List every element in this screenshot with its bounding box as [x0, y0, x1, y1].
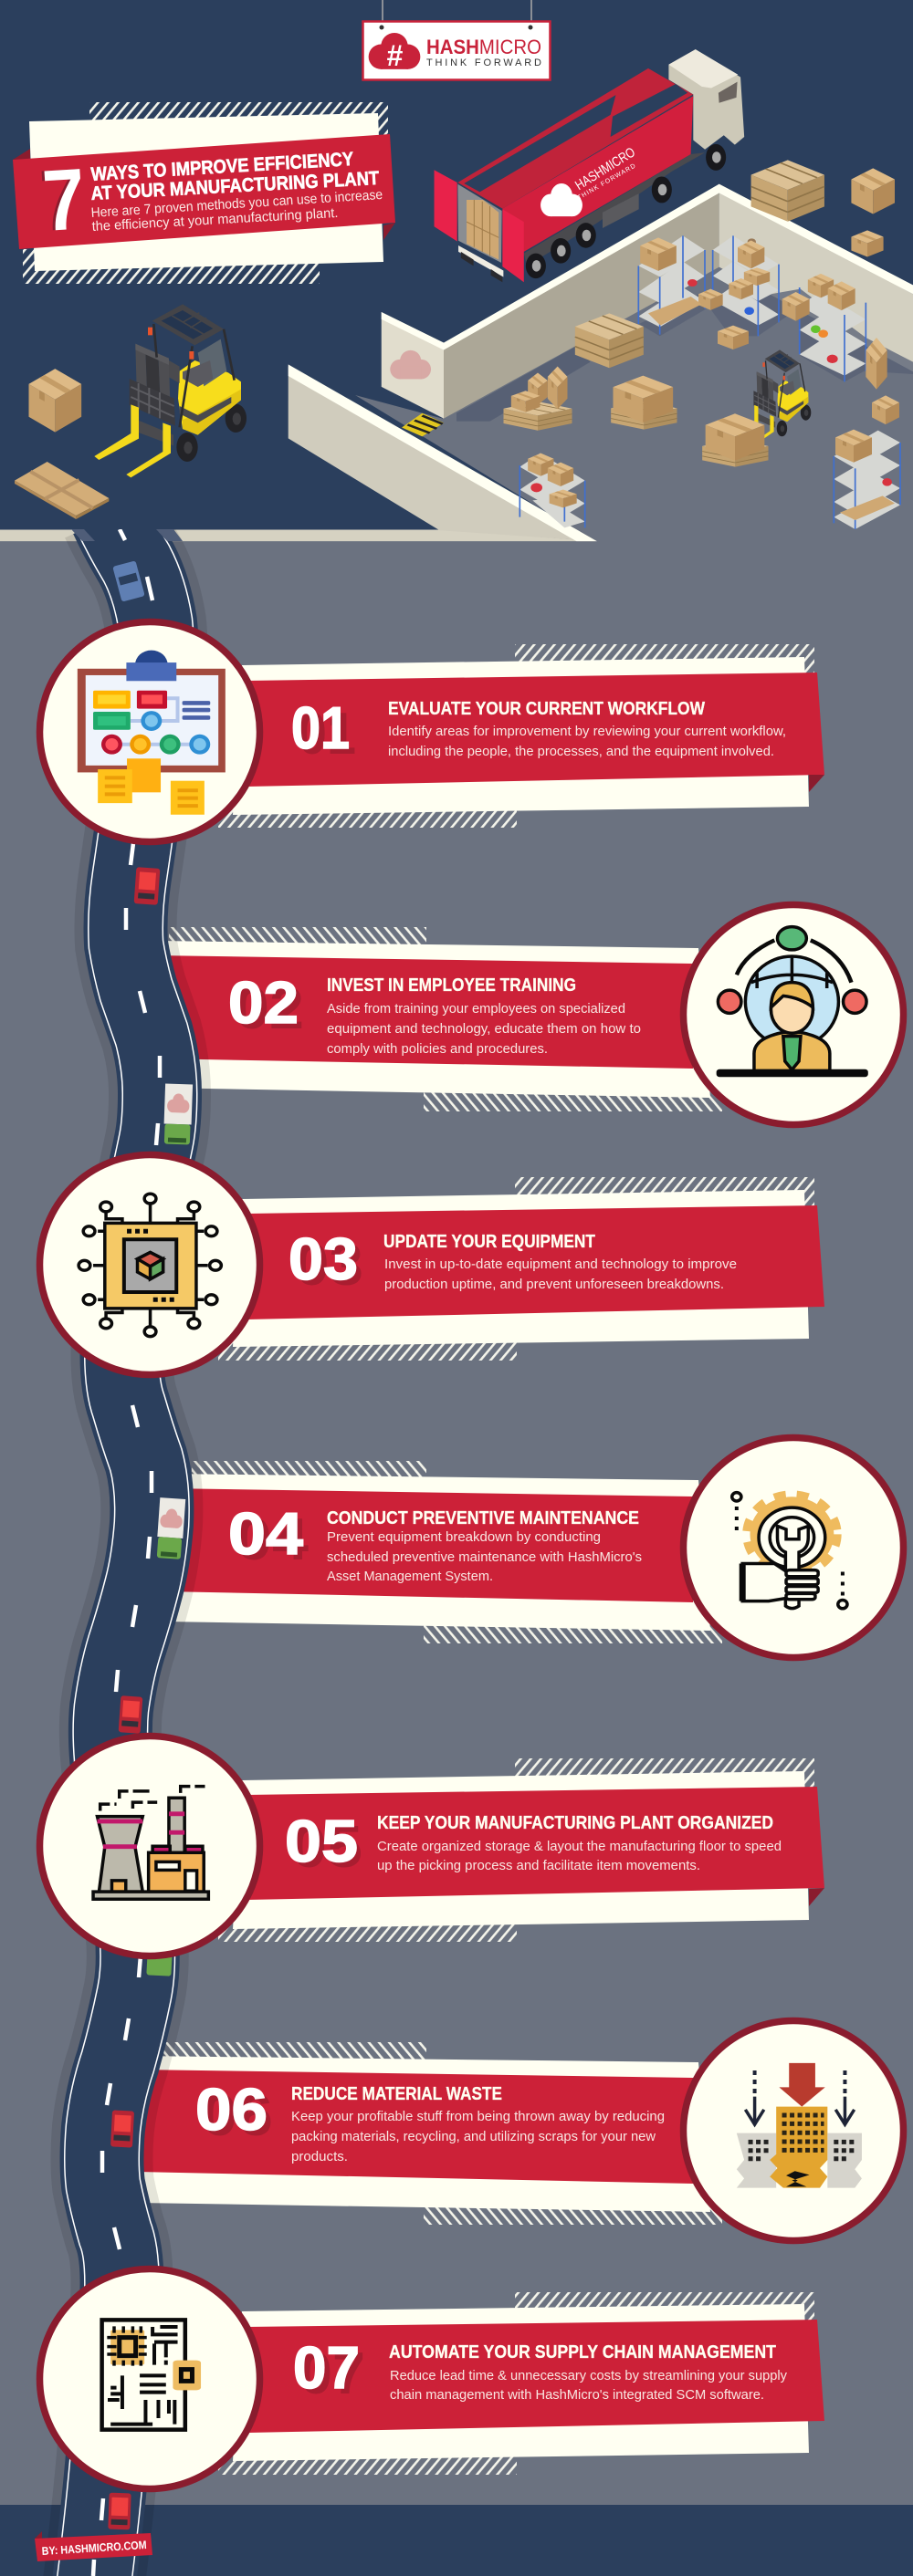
number 03: 03	[289, 1225, 358, 1292]
number 02: 02	[228, 969, 299, 1036]
icon: gear and wrench	[732, 1493, 847, 1609]
vehicle: red truck 2	[119, 1695, 142, 1734]
panel 01	[40, 622, 824, 841]
panel 04	[164, 1438, 904, 1657]
chassis	[524, 152, 705, 266]
heading 04: CONDUCT PREVENTIVE MAINTENANCE	[327, 1508, 639, 1528]
truck logo: THINK FORWARD	[577, 163, 636, 202]
footer credit label	[35, 2531, 152, 2561]
circle 06	[683, 2020, 904, 2241]
logo sign: #	[386, 39, 403, 72]
vehicle: red truck 4	[108, 2493, 131, 2529]
title banner: AT YOUR MANUFACTURING PLANT	[90, 168, 380, 204]
vehicle: red truck 3	[110, 2110, 134, 2148]
circle 04	[683, 1438, 904, 1657]
floor shadow	[456, 347, 591, 422]
panel 03	[40, 1155, 824, 1374]
spools	[530, 238, 892, 492]
heading 06: REDUCE MATERIAL WASTE	[291, 2084, 502, 2104]
hero: warehouse illustration	[0, 0, 913, 541]
logo sign: THINK FORWARD	[426, 57, 541, 68]
vehicle: blue car	[112, 560, 145, 602]
body 07: chain management with HashMicro's integrated SCM software.	[390, 2387, 764, 2403]
truck logo	[540, 144, 638, 216]
shelf A	[638, 235, 705, 335]
body 07: Reduce lead time & unnecessary costs by streamlining your supply	[390, 2368, 787, 2383]
circle 02	[683, 905, 904, 1124]
number 04: 04	[236, 1506, 309, 1572]
forklift and cartons, front	[15, 304, 247, 519]
body 06: Keep your profitable stuff from being thrown away by reducing	[291, 2109, 665, 2124]
circle 05	[40, 1736, 259, 1956]
heading 05: KEEP YOUR MANUFACTURING PLANT ORGANIZED	[377, 1813, 773, 1833]
number 01: 01	[298, 700, 356, 767]
body 01: including the people, the processes, and the equipment involved.	[388, 744, 774, 759]
panel 06	[137, 2020, 904, 2241]
banner body: Here are 7 proven methods you can use to increase	[90, 187, 383, 221]
icon: processor chip	[79, 1194, 221, 1337]
number 07: 07	[299, 2340, 365, 2406]
footer band	[0, 2505, 913, 2576]
warehouse contents	[456, 235, 913, 529]
icon: factory	[93, 1787, 208, 1899]
body 02	[327, 1001, 641, 1057]
body 02: Aside from training your employees on specialized	[327, 1001, 625, 1017]
body 06: packing materials, recycling, and utilizing scraps for your new	[291, 2129, 656, 2144]
vehicle: green truck 1	[163, 1083, 193, 1145]
body 04	[327, 1529, 642, 1584]
title banner: the efficiency at your manufacturing plant.	[91, 205, 339, 235]
circle 01	[40, 622, 259, 841]
footer credit label: BY: HASHMICRO.COM	[41, 2539, 147, 2558]
walls	[444, 190, 719, 419]
body 03	[384, 1257, 737, 1292]
heading 01: EVALUATE YOUR CURRENT WORKFLOW	[388, 699, 705, 719]
body 04: Prevent equipment breakdown by conducting	[327, 1529, 601, 1545]
circle 03	[40, 1155, 259, 1374]
vehicle: green truck 2	[156, 1497, 185, 1559]
body 01: Identify areas for improvement by reviewing your current workflow,	[388, 724, 786, 739]
body 06: products.	[291, 2149, 348, 2164]
big seven: 7	[40, 151, 88, 250]
cartons and pallets	[503, 237, 899, 520]
big seven: 7	[37, 151, 85, 250]
title banner	[13, 102, 395, 284]
logo sign	[363, 0, 550, 80]
body 04: Asset Management System.	[327, 1569, 493, 1584]
body 05: up the picking process and facilitate item movements.	[377, 1858, 700, 1873]
kerb strip	[0, 529, 597, 541]
logo sign: HASHMICRO	[426, 36, 541, 58]
body 01	[388, 724, 786, 759]
number 04: 04	[228, 1500, 303, 1567]
number 07: 07	[293, 2334, 360, 2401]
number 03: 03	[295, 1231, 363, 1298]
number 01: 01	[291, 694, 350, 761]
circle 07	[40, 2268, 259, 2489]
body 07	[390, 2368, 787, 2403]
wheels	[526, 144, 726, 278]
shelf D	[519, 454, 585, 527]
number 05: 05	[285, 1808, 358, 1874]
number 05: 05	[291, 1813, 362, 1880]
cab	[668, 49, 744, 150]
body 05: Create organized storage & layout the manufacturing floor to speed	[377, 1839, 782, 1854]
heading 02: INVEST IN EMPLOYEE TRAINING	[327, 975, 576, 996]
panel 05	[40, 1736, 824, 1956]
shelf B	[713, 235, 779, 336]
pallet on forks	[702, 413, 768, 467]
shelf C	[800, 287, 866, 381]
outside cartons	[751, 160, 824, 222]
icon: buildings and arrows	[737, 2063, 862, 2188]
heading 07: AUTOMATE YOUR SUPPLY CHAIN MANAGEMENT	[389, 2342, 776, 2362]
panel 07	[40, 2268, 824, 2489]
warehouse floor	[355, 195, 913, 541]
banner heading: WAYS TO IMPROVE EFFICIENCY	[90, 149, 354, 185]
body 03: Invest in up-to-date equipment and technology to improve	[384, 1257, 737, 1272]
body 02: comply with policies and procedures.	[327, 1041, 548, 1057]
body 06	[291, 2109, 665, 2164]
trailer	[457, 68, 693, 209]
vehicle: green truck 3	[146, 1952, 173, 1976]
body 02: equipment and technology, educate them on how to	[327, 1021, 641, 1037]
icon: employee and globe	[718, 927, 866, 1076]
body 03: production uptime, and prevent unforeseen breakdowns.	[384, 1277, 724, 1292]
forklift: warehouse	[737, 349, 811, 445]
road	[71, 516, 183, 2576]
heading 03: UPDATE YOUR EQUIPMENT	[383, 1232, 595, 1252]
number 02: 02	[235, 975, 304, 1041]
truck and outside cartons	[435, 49, 895, 282]
truck logo: HASHMICRO	[572, 144, 638, 193]
body 05	[377, 1839, 782, 1873]
icon: workflow board	[78, 651, 226, 815]
body 04: scheduled preventive maintenance with HashMicro's	[327, 1549, 642, 1565]
vehicle: red truck 1	[134, 867, 160, 905]
wall logo	[390, 350, 431, 379]
number 06: 06	[195, 2076, 268, 2143]
icon: circuit board	[102, 2320, 201, 2430]
panel 02	[155, 905, 904, 1124]
number 06: 06	[202, 2081, 273, 2148]
shelf E	[834, 431, 900, 529]
